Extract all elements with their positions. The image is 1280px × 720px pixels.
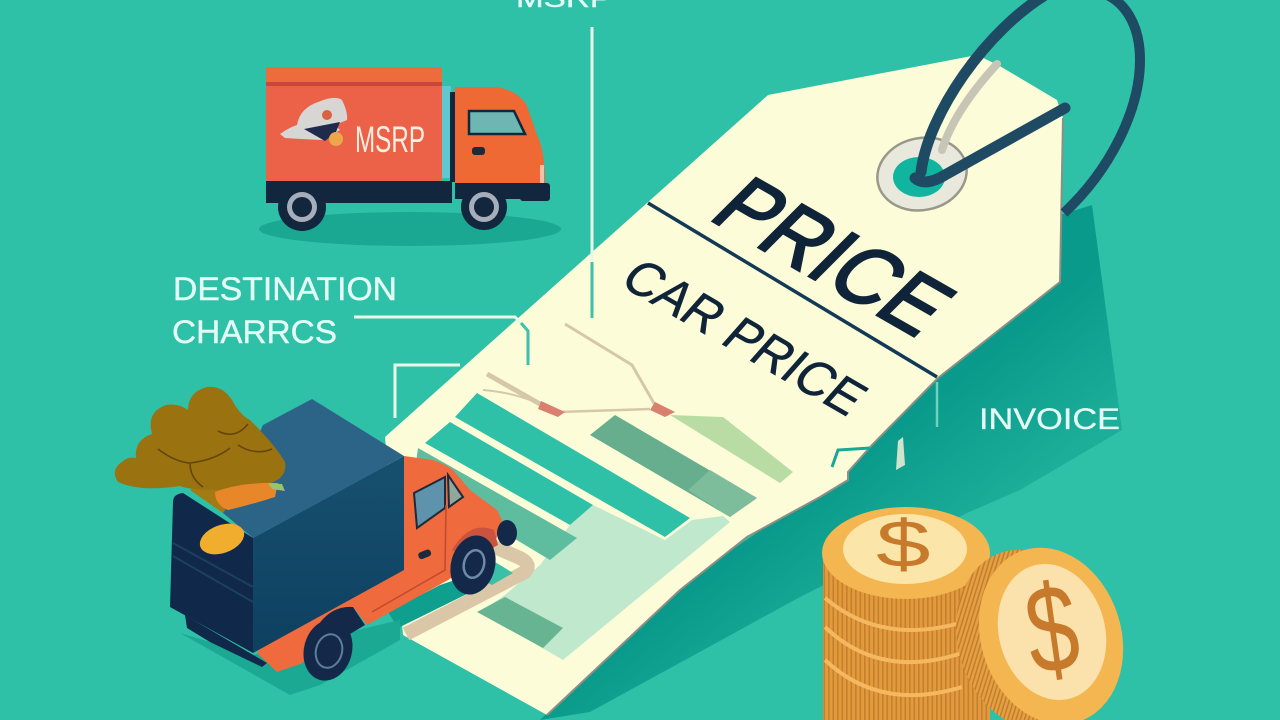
cab window [469,111,525,134]
front wheel [444,528,502,600]
tag edge [547,118,1063,715]
invoice leader lines [832,382,937,470]
teal corner block [478,562,513,585]
route connectors [483,324,675,417]
truck logo [280,98,347,146]
label: destination charges [172,271,397,350]
string [915,0,1140,213]
dollar sign: $ [1017,557,1087,702]
label: INVOICE: INVOICE [979,403,1120,436]
rear wheel [278,183,326,231]
MSRP leader line [590,27,594,318]
coin stack [822,507,990,720]
destination leader line [354,317,528,365]
PRICE heading: PRICE [693,162,973,352]
truck ground shadow [259,212,561,246]
cab and lower body [257,456,502,672]
door details [372,505,446,612]
label: destination charges: CHARRCS [172,314,337,350]
cargo box [266,67,442,181]
label: destination charges: DESTINATION [173,271,397,307]
tag shadow [540,205,1122,720]
eyelet [870,129,974,219]
CAR PRICE subheading: CAR PRICE [611,249,879,425]
cab gap [442,86,456,182]
chassis [266,165,550,203]
tan route path [406,545,528,634]
side face [253,456,404,653]
rear wheel [297,607,365,686]
truck shadow [180,620,400,695]
bracket leader line [395,365,460,418]
yellow cargo [196,518,248,560]
side window [414,477,445,528]
truck MSRP label: MSRP [355,119,425,160]
top truck: MSRP [259,67,561,246]
back face [170,493,253,653]
windshield [448,475,463,507]
coins [822,507,1145,720]
leaning coin [933,529,1145,720]
under-carriage [185,615,267,667]
roof [223,399,404,538]
carrots [215,483,285,510]
price tag [385,55,1063,715]
brown sacks [115,387,285,513]
dollar sign: $ [876,507,931,581]
front bumper [497,520,517,546]
tag divider [648,203,937,377]
tag body [385,55,1063,715]
shadow beneath cab [388,575,475,628]
front wheel [461,184,507,230]
door handle [472,147,485,155]
cab [455,87,545,185]
bottom truck [115,387,517,695]
back stripes [173,543,253,602]
tag bar chart [415,393,793,660]
